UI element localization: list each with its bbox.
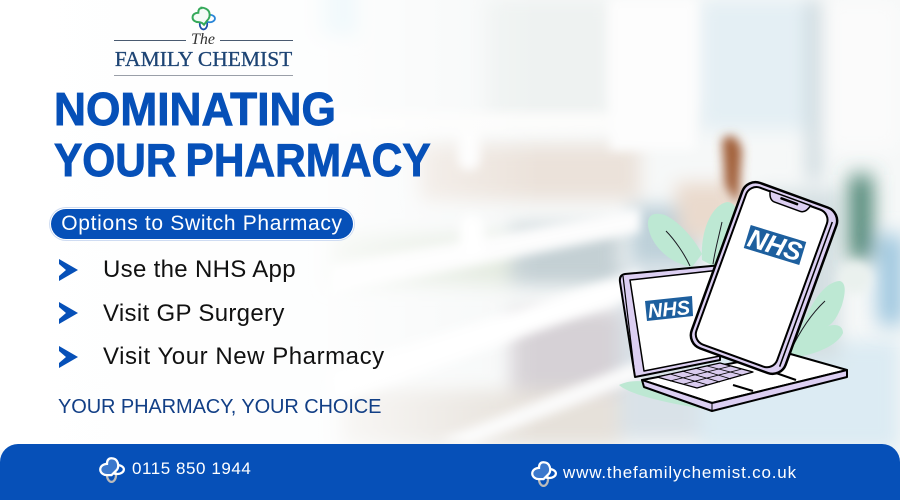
illustration: laptop and phone with NHS logos <box>618 180 848 412</box>
icon: arrow 3 <box>59 346 78 368</box>
title line 1: NOMINATING <box>54 83 336 135</box>
icon: arrow 2 <box>59 302 78 324</box>
NHS logo on phone: NHS <box>744 223 806 268</box>
footer bar <box>0 444 900 500</box>
script word The: The <box>191 31 215 48</box>
title line 2: YOUR PHARMACY <box>54 134 431 186</box>
list item 1: Use the NHS App <box>103 256 296 283</box>
logo icon <box>192 6 216 30</box>
tagline: YOUR PHARMACY, YOUR CHOICE <box>58 396 381 418</box>
subheading pill: Options to Switch Pharmacy <box>61 212 343 235</box>
phone <box>687 178 841 378</box>
website: www.thefamilychemist.co.uk <box>563 463 797 482</box>
list item 3: Visit Your New Pharmacy <box>103 343 385 370</box>
list item 2: Visit GP Surgery <box>103 300 285 327</box>
title <box>54 83 431 186</box>
laptop <box>620 265 847 411</box>
phone number: 0115 850 1944 <box>132 459 251 478</box>
logo: The Family Chemist <box>114 6 293 76</box>
NHS logo on laptop: NHS <box>647 297 692 323</box>
icon: web logo <box>531 461 557 487</box>
rule left <box>114 40 186 41</box>
icon: phone logo <box>99 457 125 483</box>
rule right <box>220 40 293 41</box>
leaves <box>619 202 845 410</box>
icon: arrow 1 <box>59 259 78 281</box>
wordmark: FAMILY CHEMIST <box>115 47 292 71</box>
rule bottom <box>114 75 293 76</box>
